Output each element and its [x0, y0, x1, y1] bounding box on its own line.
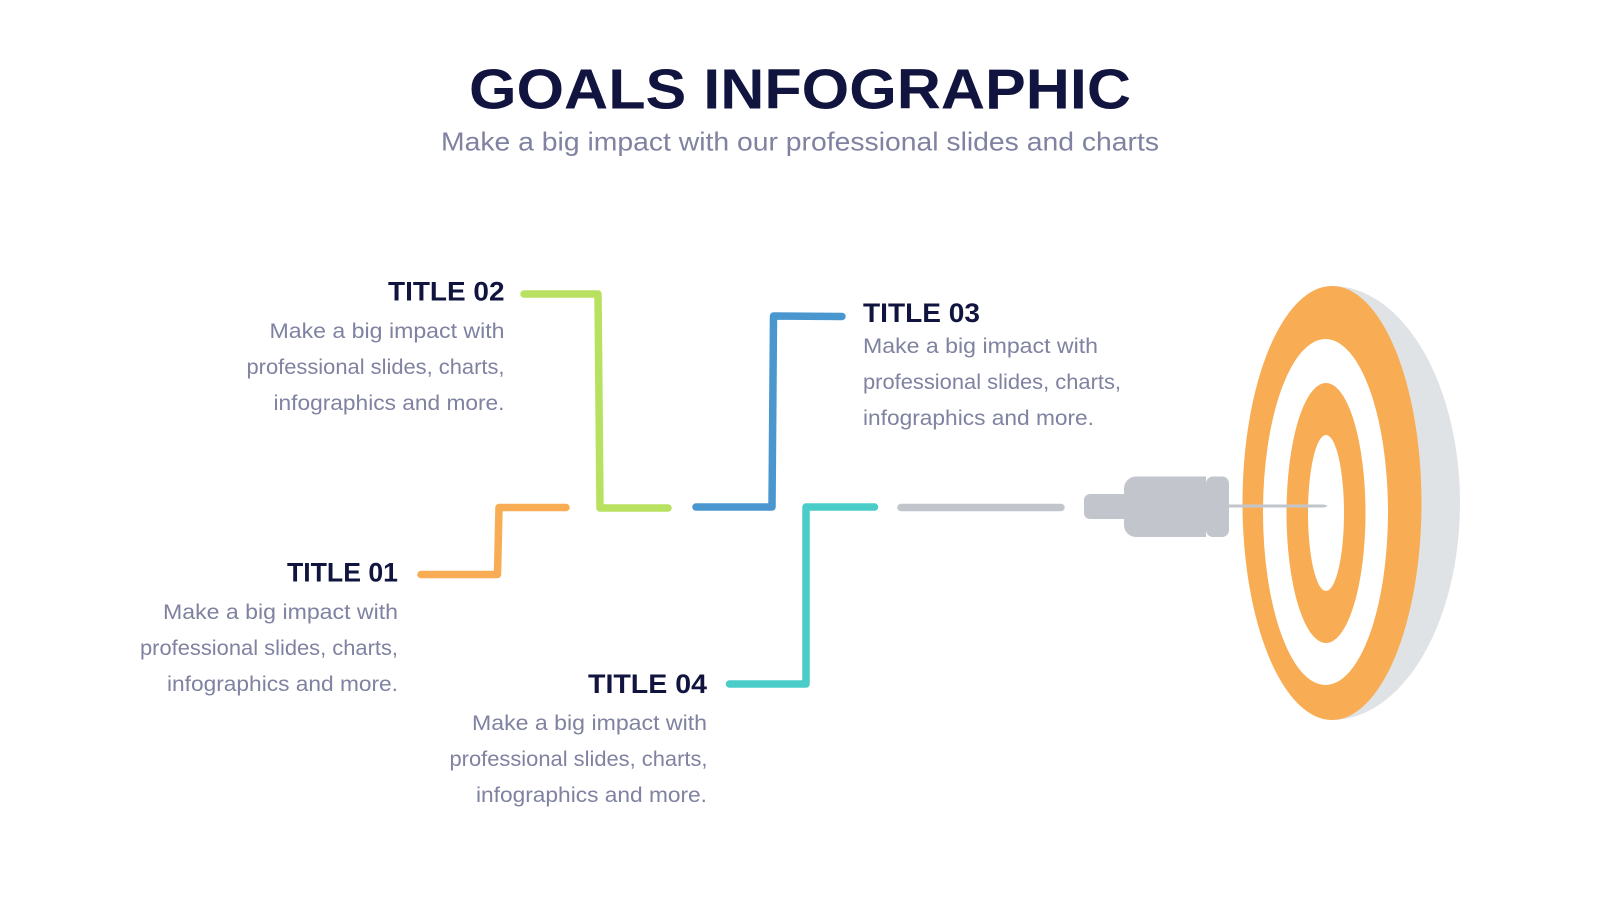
body text: title 04: Make a big impact with [472, 712, 707, 735]
connector: teal step [730, 507, 874, 684]
body text: title 01: Make a big impact with [163, 601, 398, 624]
body text: title 02: infographics and more. [274, 392, 504, 415]
panel: title 04 [450, 669, 708, 807]
body text: title 02 [246, 320, 504, 415]
icon: dart [1084, 476, 1328, 537]
body text: title 01: infographics and more. [167, 673, 398, 696]
icon: target [1242, 286, 1460, 720]
connector: grey dash [901, 504, 1061, 511]
heading: title 03: TITLE 03 [863, 298, 980, 328]
connector: orange step [421, 508, 566, 574]
body text: title 04 [450, 712, 708, 807]
panel: title 03 [863, 298, 1121, 430]
subtitle: Make a big impact with our professional slides and charts [441, 126, 1159, 156]
body text: title 01: professional slides, charts, [140, 637, 398, 660]
body text: title 02: professional slides, charts, [246, 356, 504, 379]
connector: blue step [696, 316, 842, 507]
panel: title 01 [140, 558, 398, 696]
heading: title 02: TITLE 02 [388, 276, 504, 306]
panel: title 02 [246, 276, 504, 415]
body text: title 02: Make a big impact with [270, 320, 504, 343]
connector: green step [524, 294, 668, 508]
heading: title 04: TITLE 04 [588, 669, 707, 699]
body text: title 03: Make a big impact with [863, 335, 1098, 358]
body text: title 04: infographics and more. [476, 784, 707, 807]
title: GOALS INFOGRAPHIC [469, 58, 1131, 122]
body text: title 03: professional slides, charts, [863, 371, 1121, 394]
body text: title 04: professional slides, charts, [450, 748, 708, 771]
body text: title 01 [140, 601, 398, 696]
heading: title 01: TITLE 01 [287, 558, 398, 588]
body text: title 03: infographics and more. [863, 407, 1094, 430]
body text: title 03 [863, 335, 1121, 430]
